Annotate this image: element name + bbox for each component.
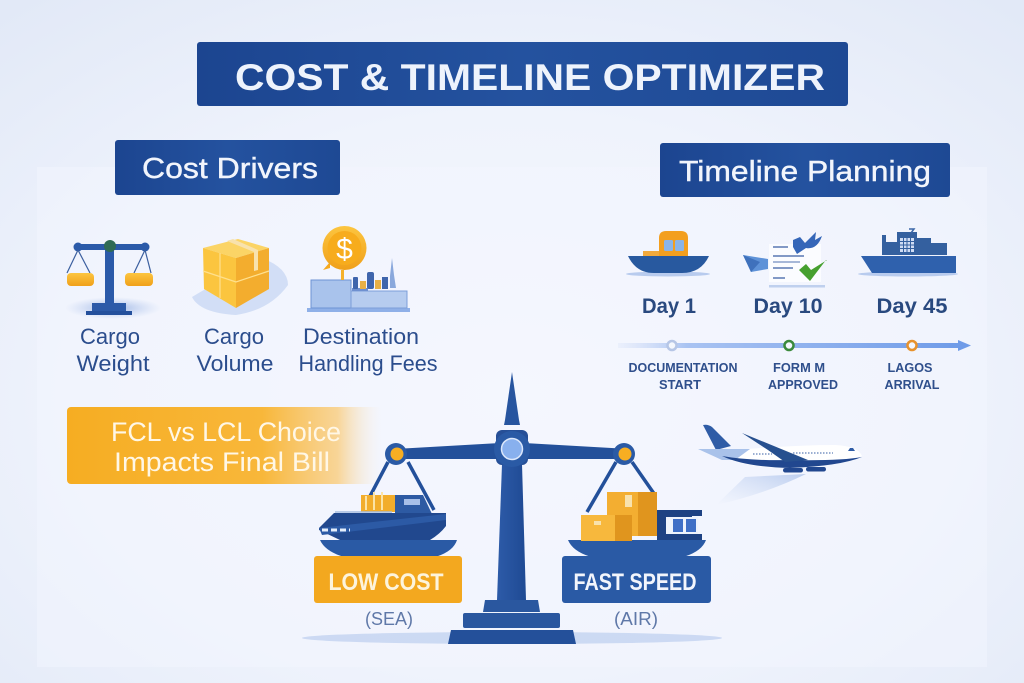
badge: fast speed: FAST SPEED	[574, 569, 696, 596]
scale beam	[395, 443, 629, 459]
right hanger	[587, 443, 655, 512]
milestone markers	[668, 341, 916, 350]
central balance scale	[302, 372, 722, 644]
title banner: COST & TIMELINE OPTIMIZER	[235, 57, 825, 98]
icon: destination handling fees: $	[336, 233, 353, 266]
heading: cost drivers	[115, 140, 340, 195]
timeline arrow	[618, 340, 971, 351]
label: day 10: Day 10	[754, 295, 822, 318]
label: documentation start: START	[659, 378, 701, 392]
label: day 1: Day 1	[642, 295, 696, 318]
label: cargo weight: Weight	[76, 351, 150, 376]
icon: day 1 boat	[626, 231, 710, 276]
callout: fcl vs lcl: FCL vs LCL Choice	[111, 417, 341, 447]
badge: fast speed	[562, 556, 711, 603]
label: cargo volume: Volume	[196, 351, 274, 376]
callout: fcl vs lcl: Impacts Final Bill	[114, 447, 330, 477]
icon: destination handling fees	[307, 226, 410, 312]
label: air: (AIR)	[614, 609, 658, 629]
panel: cost drivers	[65, 226, 438, 376]
label: documentation start: DOCUMENTATION	[628, 361, 738, 375]
label: cargo weight: Cargo	[80, 324, 140, 349]
label: day 45: Day 45	[876, 295, 948, 318]
icon: cargo weight scale	[65, 240, 161, 319]
callout: fcl vs lcl	[67, 407, 382, 484]
label: lagos arrival: LAGOS	[888, 361, 932, 375]
panel: timeline planning	[618, 229, 971, 392]
badge: low cost: LOW COST	[328, 569, 444, 596]
badge: low cost	[314, 556, 462, 603]
left pan with ship	[319, 492, 457, 562]
label: form m approved: APPROVED	[768, 378, 838, 392]
heading: cost drivers: Cost Drivers	[142, 153, 318, 185]
label: destination handling fees: Handling Fees	[298, 351, 438, 376]
label: sea: (SEA)	[365, 609, 413, 629]
icon: day 45 cargo ship	[858, 229, 958, 276]
icon: airplane	[698, 425, 862, 505]
label: cargo volume: Cargo	[204, 324, 264, 349]
left hanger	[368, 443, 434, 510]
scale hub	[494, 430, 530, 467]
scale ground shadow	[302, 632, 722, 644]
right pan with boxes	[568, 492, 706, 562]
label: lagos arrival: ARRIVAL	[884, 378, 940, 392]
scale post and base	[448, 464, 576, 644]
label: form m approved: FORM M	[773, 361, 825, 375]
icon: day 10 form and check	[743, 232, 827, 288]
scale spire	[504, 372, 520, 425]
label: destination handling fees: Destination	[303, 324, 419, 349]
heading: timeline planning	[660, 143, 950, 197]
heading: timeline planning: Timeline Planning	[679, 156, 931, 188]
title banner	[197, 42, 848, 106]
icon: cargo volume box	[192, 239, 288, 315]
